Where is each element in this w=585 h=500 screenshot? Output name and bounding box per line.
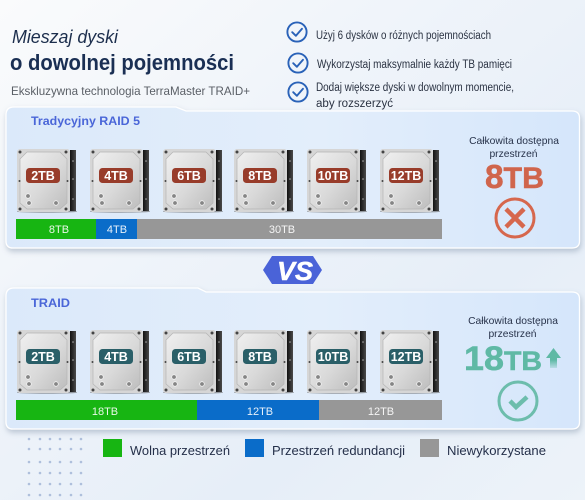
legend [103,439,546,458]
disk 8TB: 8TB [248,350,272,364]
disk 12TB [379,330,441,394]
feature: every TB: Wykorzystaj maksymalnie każdy TB pamięci [317,59,512,71]
disk 12TB: 12TB [391,350,421,364]
feature: expand [288,82,514,110]
VS badge: VS [277,256,314,286]
disk 10TB: 10TB [318,350,348,364]
capacity bar: 18TB [92,406,118,418]
feature: expand: aby rozszerzyć [316,98,393,110]
disk 6TB: 6TB [177,169,201,183]
disk 2TB: 2TB [31,350,55,364]
feature list [287,22,514,110]
disk 10TB: 10TB [318,169,348,183]
legend: free space: Wolna przestrzeń [130,443,230,458]
disk 2TB [16,330,78,394]
feature: expand: Dodaj większe dyski w dowolnym momencie, [316,82,514,94]
feature: every TB [288,53,512,73]
subtitle: Ekskluzywna technologia TerraMaster TRAID+ [11,84,250,98]
icon: cross [496,199,534,237]
disk 2TB [16,149,78,213]
disk 6TB [162,149,224,213]
panel heading: TRAID [31,298,70,310]
title [10,26,234,75]
disk 8TB: 8TB [248,169,272,183]
disk 12TB: 12TB [391,169,421,183]
disk 8TB [233,149,295,213]
total capacity label [469,136,559,160]
legend: free space [103,439,230,458]
disk 4TB: 4TB [104,169,128,183]
capacity bar: 4TB [107,224,127,236]
panel heading: Tradycyjny RAID 5 [31,116,141,128]
title: o dowolnej pojemności [10,50,234,75]
total capacity label: Całkowita dostępna [469,136,559,147]
feature: six disks [287,22,491,42]
panel: traditional RAID 5 [6,107,580,248]
disk 12TB [379,149,441,213]
title: Mieszaj dyski [12,26,119,47]
capacity bar [16,219,442,239]
capacity bar: 8TB [49,224,69,236]
feature: six disks: Użyj 6 dysków o różnych pojemnościach [316,30,491,42]
panel: TRAID [6,288,580,429]
disk 10TB [306,330,368,394]
total capacity value: 8TB [485,158,544,195]
legend: unused [420,439,546,458]
total capacity value: 18TB [464,340,542,378]
icon: up arrow [546,348,561,368]
disk 10TB [306,149,368,213]
disk 6TB [162,330,224,394]
capacity bar: 12TB [368,406,394,418]
disk 4TB [89,149,151,213]
legend: redundancy [245,439,405,458]
VS badge [263,256,322,286]
legend: redundancy: Przestrzeń redundancji [272,443,405,458]
disk 6TB: 6TB [177,350,201,364]
total capacity label: przestrzeń [488,329,537,340]
total capacity label: przestrzeń [489,149,538,160]
icon: check [499,382,537,420]
disk 8TB [233,330,295,394]
legend: unused: Niewykorzystane [447,443,546,458]
disk 4TB [89,330,151,394]
disk 4TB: 4TB [104,350,128,364]
capacity bar [16,400,442,420]
capacity bar: 30TB [269,224,295,236]
total capacity label: Całkowita dostępna [468,316,558,327]
capacity bar: 12TB [247,406,273,418]
total capacity label [468,316,558,340]
disk 2TB: 2TB [31,169,55,183]
decorative dots [28,438,82,496]
